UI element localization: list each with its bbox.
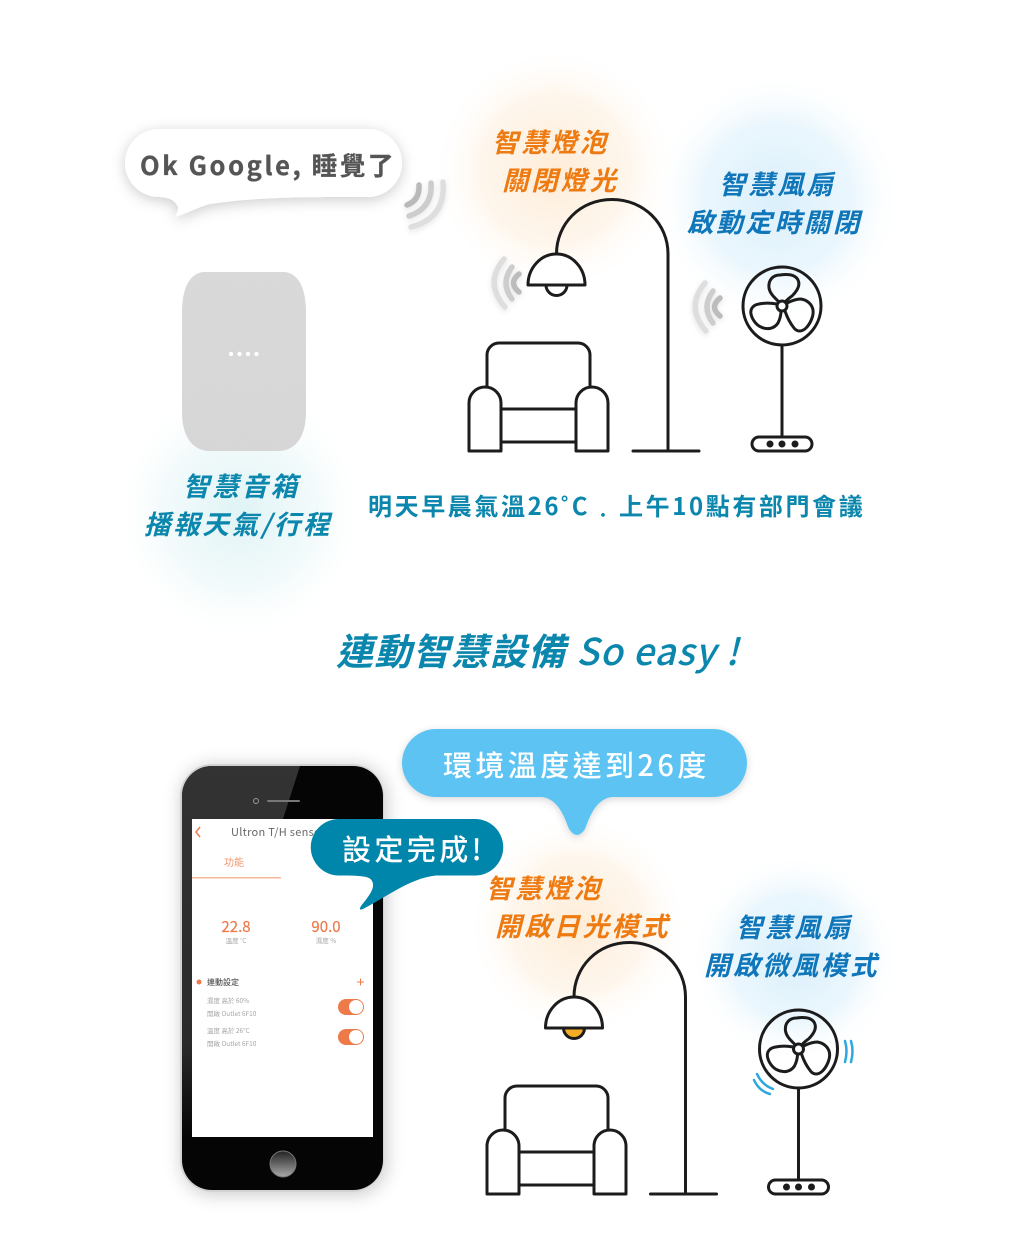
heading: smart fan timer: [687, 163, 863, 240]
glow: smart fan bottom: [689, 852, 901, 1064]
icon: sound waves by lamp: [494, 259, 519, 307]
phone screen: 溫度 高於 26°C: [207, 1025, 250, 1035]
icon: armchair top: [469, 343, 608, 451]
bubble: temperature reached: 環境溫度達到26度: [443, 743, 710, 785]
smart speaker: [182, 272, 333, 451]
phone screen: [192, 819, 373, 1137]
phone speaker and camera: [254, 798, 300, 804]
phone screen: Ultron T/H sensor: [231, 824, 326, 840]
heading: smart fan timer: 啟動定時關閉: [687, 201, 863, 240]
phone screen: 連動設定: [207, 977, 239, 988]
speech bubble: Ok Google: [125, 129, 402, 217]
phone screen: 90.0: [311, 916, 341, 937]
announcement text: ·: [595, 502, 614, 526]
heading: smart speaker: 智慧音箱: [183, 465, 302, 504]
bubble: temperature reached: [402, 729, 747, 835]
icon: armchair bottom: [487, 1086, 626, 1194]
heading: smart fan breeze: 開啟微風模式: [704, 944, 880, 983]
heading: smart bulb daylight: 開啟日光模式: [495, 905, 671, 944]
heading: smart speaker: 播報天氣/行程: [144, 503, 333, 542]
phone home button: [270, 1151, 296, 1177]
heading: smart fan timer: 智慧風扇: [719, 163, 836, 202]
icon: standing fan bottom: [760, 1010, 838, 1194]
heading: smart speaker: [144, 465, 333, 542]
glow: smart bulb top: [431, 46, 679, 294]
icon: floor lamp bottom: [546, 942, 716, 1194]
icon: sound waves by fan: [695, 283, 720, 331]
phone mockup: [180, 764, 384, 1192]
icon: sound waves from bubble: [407, 182, 443, 227]
phone screen: 濕度 %: [316, 935, 336, 945]
phone screen: 溫度 ˚C: [226, 935, 246, 945]
glow: smart bulb bottom: [466, 813, 690, 1037]
glow: smart fan top: [651, 72, 903, 324]
icon: floor lamp top: [528, 200, 699, 451]
phone screen: 22.8: [221, 916, 251, 937]
phone screen: 開啟 Outlet 6F10: [207, 1038, 257, 1048]
announcement text: 明天早晨氣溫26˚C: [368, 487, 590, 522]
heading: smart bulb daylight: [486, 867, 671, 944]
phone screen: 濕度 高於 60%: [207, 995, 249, 1005]
speech bubble: Ok Google: Ok Google, 睡覺了: [140, 146, 396, 183]
phone screen: 開啟 Outlet 6F10: [207, 1008, 257, 1018]
glow: speaker: [112, 384, 368, 640]
icon: standing fan top: [743, 267, 821, 451]
heading: smart bulb daylight: 智慧燈泡: [486, 867, 604, 906]
bubble: setup complete: 設定完成!: [342, 827, 485, 869]
phone screen: 功能: [224, 854, 244, 869]
heading: smart fan breeze: [704, 906, 880, 983]
heading: smart bulb off: [492, 121, 619, 198]
heading: smart bulb off: 關閉燈光: [502, 159, 619, 198]
main title: 連動智慧設備 So easy !: [336, 622, 742, 676]
heading: smart fan breeze: 智慧風扇: [736, 906, 853, 945]
announcement text: 上午10點有部門會議: [619, 487, 865, 522]
bubble: setup complete: [311, 819, 503, 910]
heading: smart bulb off: 智慧燈泡: [492, 121, 610, 160]
icon: breeze marks: [754, 1041, 852, 1094]
